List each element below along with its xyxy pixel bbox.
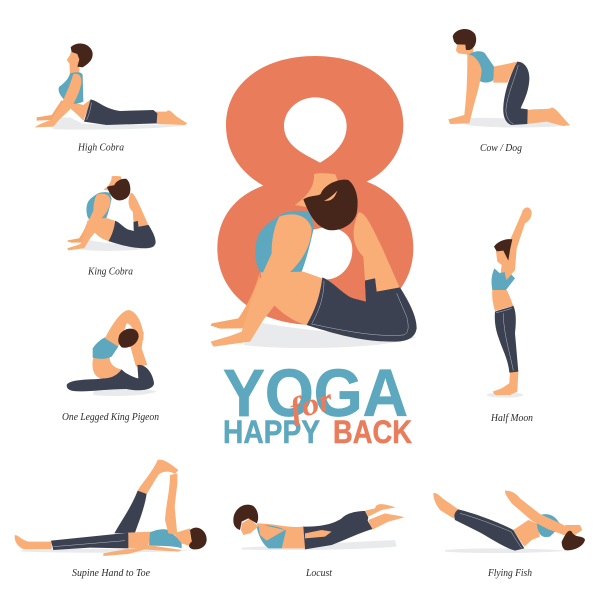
label: Half Moon: Half Moon	[490, 413, 533, 424]
label: Supine Hand to Toe: Supine Hand to Toe	[72, 568, 151, 579]
shadow	[463, 118, 570, 127]
shadow	[22, 549, 198, 553]
number 8	[217, 56, 413, 325]
label: High Cobra: High Cobra	[77, 142, 124, 154]
figure	[433, 491, 585, 551]
label: One Legged King Pigeon: One Legged King Pigeon	[62, 412, 159, 423]
main figure	[211, 173, 417, 347]
figure	[67, 310, 154, 391]
label: Flying Fish: Flying Fish	[487, 568, 532, 579]
central panel: number 8 with King Cobra figure	[211, 56, 417, 348]
pose: Half Moon	[487, 207, 532, 398]
figure	[492, 207, 532, 395]
pose: One Legged King Pigeon	[67, 310, 157, 396]
floor shadow	[243, 323, 417, 348]
label: Cow / Dog: Cow / Dog	[480, 143, 522, 154]
heading YOGA: YOGA	[223, 356, 408, 431]
shadow	[445, 548, 568, 553]
pose: Supine Hand to Toe	[15, 460, 207, 556]
pose: Cow / Dog	[448, 29, 570, 127]
heading HAPPY: HAPPY	[223, 414, 320, 450]
title: YOGA for HAPPY BACK	[223, 356, 412, 450]
figure	[233, 504, 404, 549]
figure	[67, 176, 156, 250]
figure	[15, 460, 207, 556]
label: King Cobra: King Cobra	[87, 266, 133, 278]
shadow	[93, 388, 157, 396]
shadow	[81, 240, 156, 251]
shadow	[242, 540, 397, 550]
label: Locust: Locust	[305, 568, 332, 579]
lower counter of the 8	[300, 227, 352, 279]
pose: King Cobra	[67, 176, 156, 251]
pose: Locust	[233, 504, 404, 550]
shadow	[53, 117, 187, 130]
figure	[448, 29, 570, 126]
pose: Flying Fish	[433, 491, 585, 553]
pose: High Cobra	[35, 44, 187, 130]
figure	[35, 44, 187, 127]
script word for: for	[285, 381, 337, 427]
shadow	[487, 392, 523, 398]
heading BACK: BACK	[333, 414, 412, 450]
